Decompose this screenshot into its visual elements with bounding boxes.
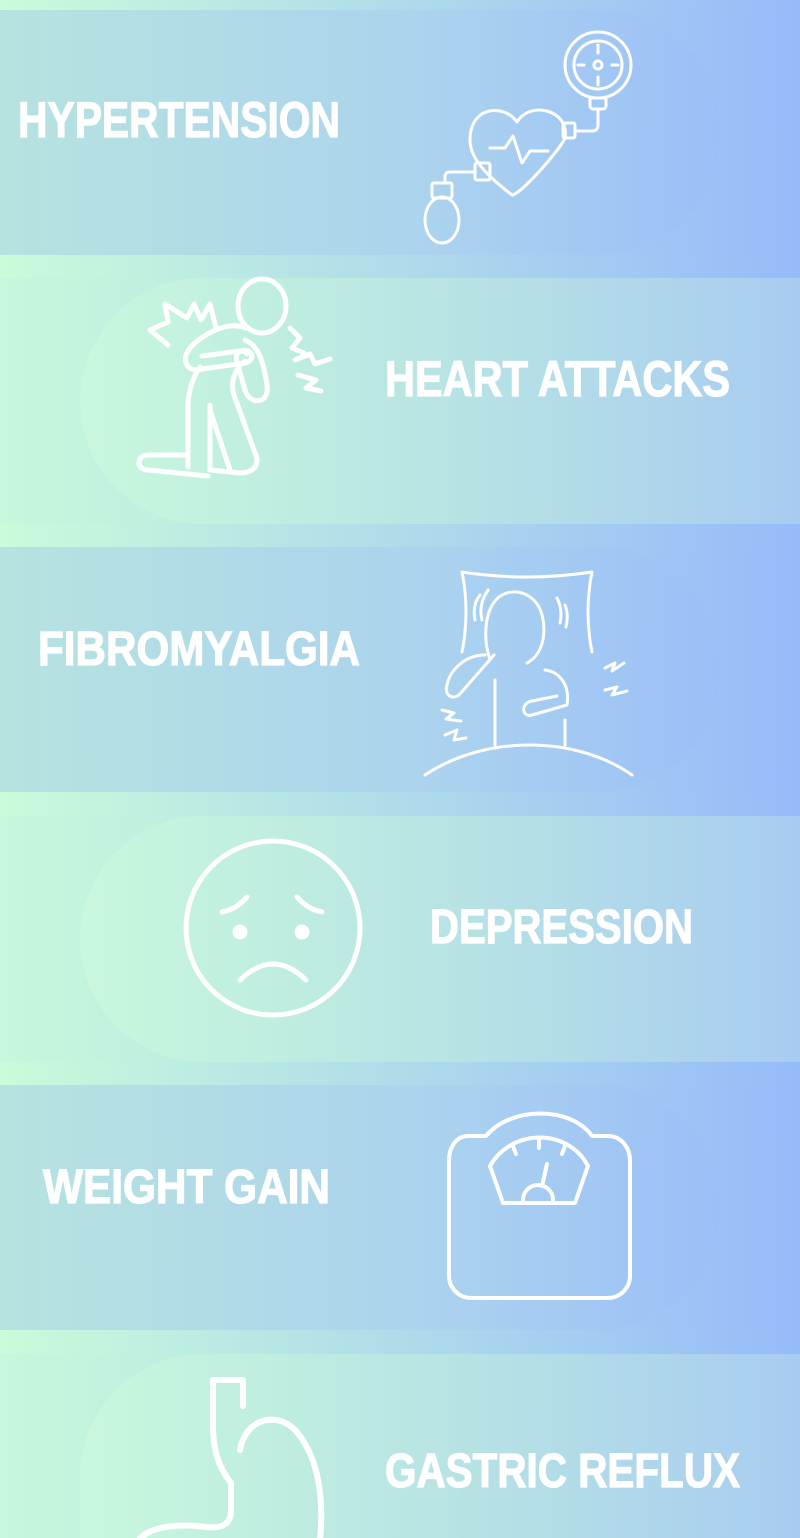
heading: depression: DEPRESSION: [430, 901, 693, 954]
heading: heart attacks: HEART ATTACKS: [385, 351, 730, 407]
panel: gastric reflux: [0, 1354, 800, 1538]
icon: person in bed with pain: [425, 572, 632, 775]
icon: sad face: [186, 841, 360, 1015]
panel: depression: [0, 816, 800, 1062]
panel: weight gain: [0, 1085, 800, 1330]
icon: person with chest pain: [139, 279, 330, 476]
heading: hypertension: HYPERTENSION: [18, 92, 340, 148]
heading: weight gain: WEIGHT GAIN: [43, 1161, 330, 1214]
icon: bathroom scale: [449, 1114, 630, 1298]
icon: blood pressure monitor: [425, 32, 631, 243]
panel: hypertension: [0, 10, 800, 255]
icon: stomach: [138, 1380, 321, 1538]
panel: fibromyalgia: [0, 547, 800, 792]
heading: fibromyalgia: FIBROMYALGIA: [38, 623, 360, 676]
panel: heart attacks: [0, 278, 800, 524]
heading: gastric reflux: GASTRIC REFLUX: [385, 1445, 740, 1498]
